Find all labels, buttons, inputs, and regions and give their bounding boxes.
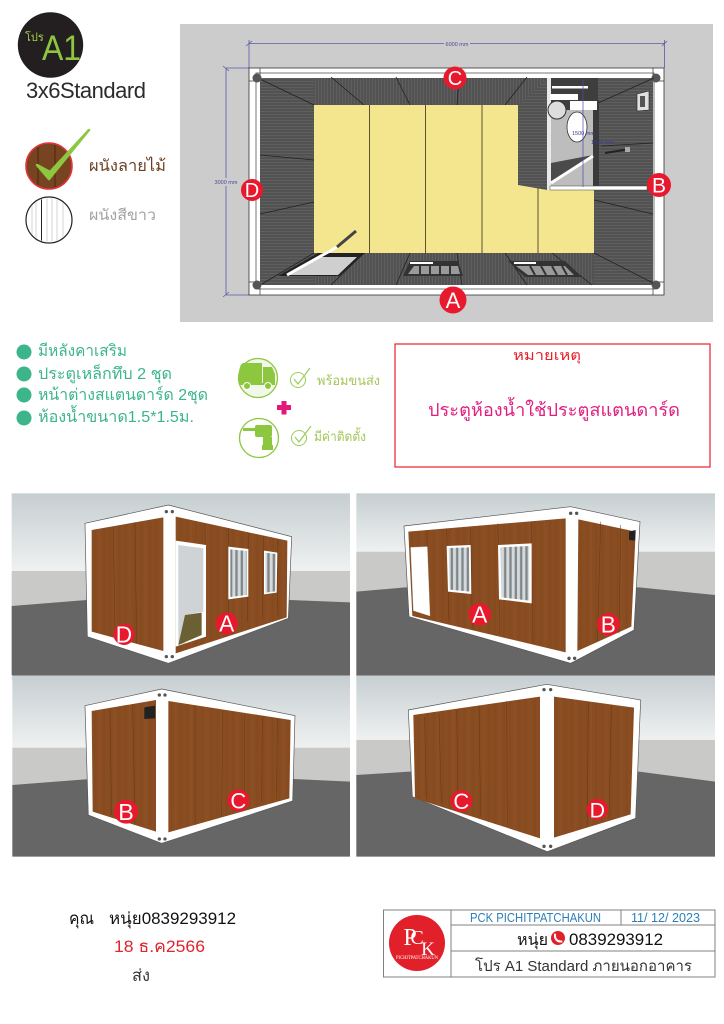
- company logo: [389, 915, 445, 971]
- marker B: B: [652, 174, 666, 198]
- bathroom: 1500 mm: [572, 131, 595, 137]
- promo badge: A1: [18, 12, 83, 78]
- company logo: K: [421, 939, 435, 960]
- marker D: D: [245, 180, 259, 202]
- promo badge: A1: A1: [42, 29, 81, 68]
- marker A: [440, 286, 466, 314]
- customer info: ส่ง: [132, 967, 150, 985]
- view: sides D and A: D: [116, 622, 132, 648]
- company logo: C: [410, 927, 424, 949]
- promo badge: A1: โปร: [25, 30, 44, 44]
- dimension: 6000 mm: 6000 mm: [446, 42, 469, 48]
- company logo: P: [403, 925, 417, 951]
- title block: โปร A1 Standard ภายนอกอาคาร: [475, 957, 692, 975]
- customer info: คุณ: [69, 910, 94, 929]
- customer info: 18 ธ.ค2566: [114, 938, 205, 956]
- bathroom: [518, 78, 649, 190]
- note box: [395, 344, 710, 467]
- view: sides B and C: [12, 675, 350, 857]
- feature: steel door: ประตูเหล็กทึบ 2 ชุด: [38, 363, 172, 384]
- icon: phone: [551, 931, 565, 945]
- customer info: หนุ่ย0839293912: [109, 910, 236, 929]
- title block: PCK PICHITPATCHAKUN: [470, 911, 601, 925]
- container frame: [249, 68, 664, 295]
- installation fee label: [292, 426, 366, 446]
- model title: 3x6Standard: [26, 78, 146, 103]
- marker B: [647, 173, 671, 198]
- view: sides B and C: C: [230, 788, 246, 813]
- dimension: 3000 mm: [214, 66, 249, 297]
- wall option: white: [26, 197, 156, 243]
- view: sides A and B: B: [601, 611, 616, 637]
- door on plan: [278, 231, 365, 276]
- title block: 11/ 12/ 2023: [631, 911, 700, 925]
- title block: [384, 910, 715, 977]
- wall option: wood pattern (selected): [26, 130, 166, 189]
- view: sides A and B: [356, 493, 715, 680]
- feature list: [16, 342, 208, 426]
- wall option: white: ผนังสีขาว: [89, 207, 156, 224]
- dimension: 6000 mm: [246, 40, 667, 68]
- plus sign: [277, 401, 291, 414]
- feature: steel door: [16, 363, 172, 384]
- view: sides C and D: [356, 675, 715, 857]
- icon: truck: [238, 358, 278, 398]
- note box: หมายเหตุ: [513, 347, 581, 364]
- ready to ship label: พร้อมขนส่ง: [317, 373, 380, 388]
- customer info: [69, 910, 236, 985]
- note box: ประตูห้องน้ำใช้ประตูสแตนดาร์ด: [428, 397, 680, 421]
- feature: windows: หน้าต่างสแตนดาร์ด 2ชุด: [38, 385, 208, 405]
- title block: 0839293912: [569, 931, 663, 949]
- feature: bathroom size: ห้องน้ำขนาด1.5*1.5ม.: [38, 405, 194, 426]
- feature: extra roof: มีหลังคาเสริม: [38, 342, 127, 360]
- installation fee label: มีค่าติดตั้ง: [314, 427, 366, 444]
- icon: drill: [240, 418, 278, 458]
- view: sides A and B: A: [472, 601, 488, 627]
- view: sides D and A: A: [219, 610, 235, 636]
- windows on plan: [403, 261, 582, 277]
- company logo: PICHITPATCHAKUN: [396, 956, 438, 961]
- wall option: wood pattern (selected): ผนังลายไม้: [89, 156, 166, 175]
- marker D: [241, 179, 263, 202]
- floor plan panel: [180, 24, 713, 322]
- view: sides D and A: [12, 493, 350, 680]
- marker A: A: [446, 288, 461, 313]
- title block: หนุ่ย: [517, 932, 548, 950]
- interior walls: [260, 77, 654, 285]
- view: sides B and C: B: [118, 799, 134, 825]
- dimension: 3000 mm: 3000 mm: [215, 180, 238, 186]
- ready to ship label: [290, 368, 380, 388]
- bathroom: 1500 mm: [591, 140, 614, 146]
- view: sides C and D: D: [590, 798, 605, 822]
- view: sides C and D: C: [453, 789, 469, 814]
- floor: [314, 105, 594, 253]
- marker C: C: [448, 68, 462, 90]
- marker C: [444, 66, 466, 90]
